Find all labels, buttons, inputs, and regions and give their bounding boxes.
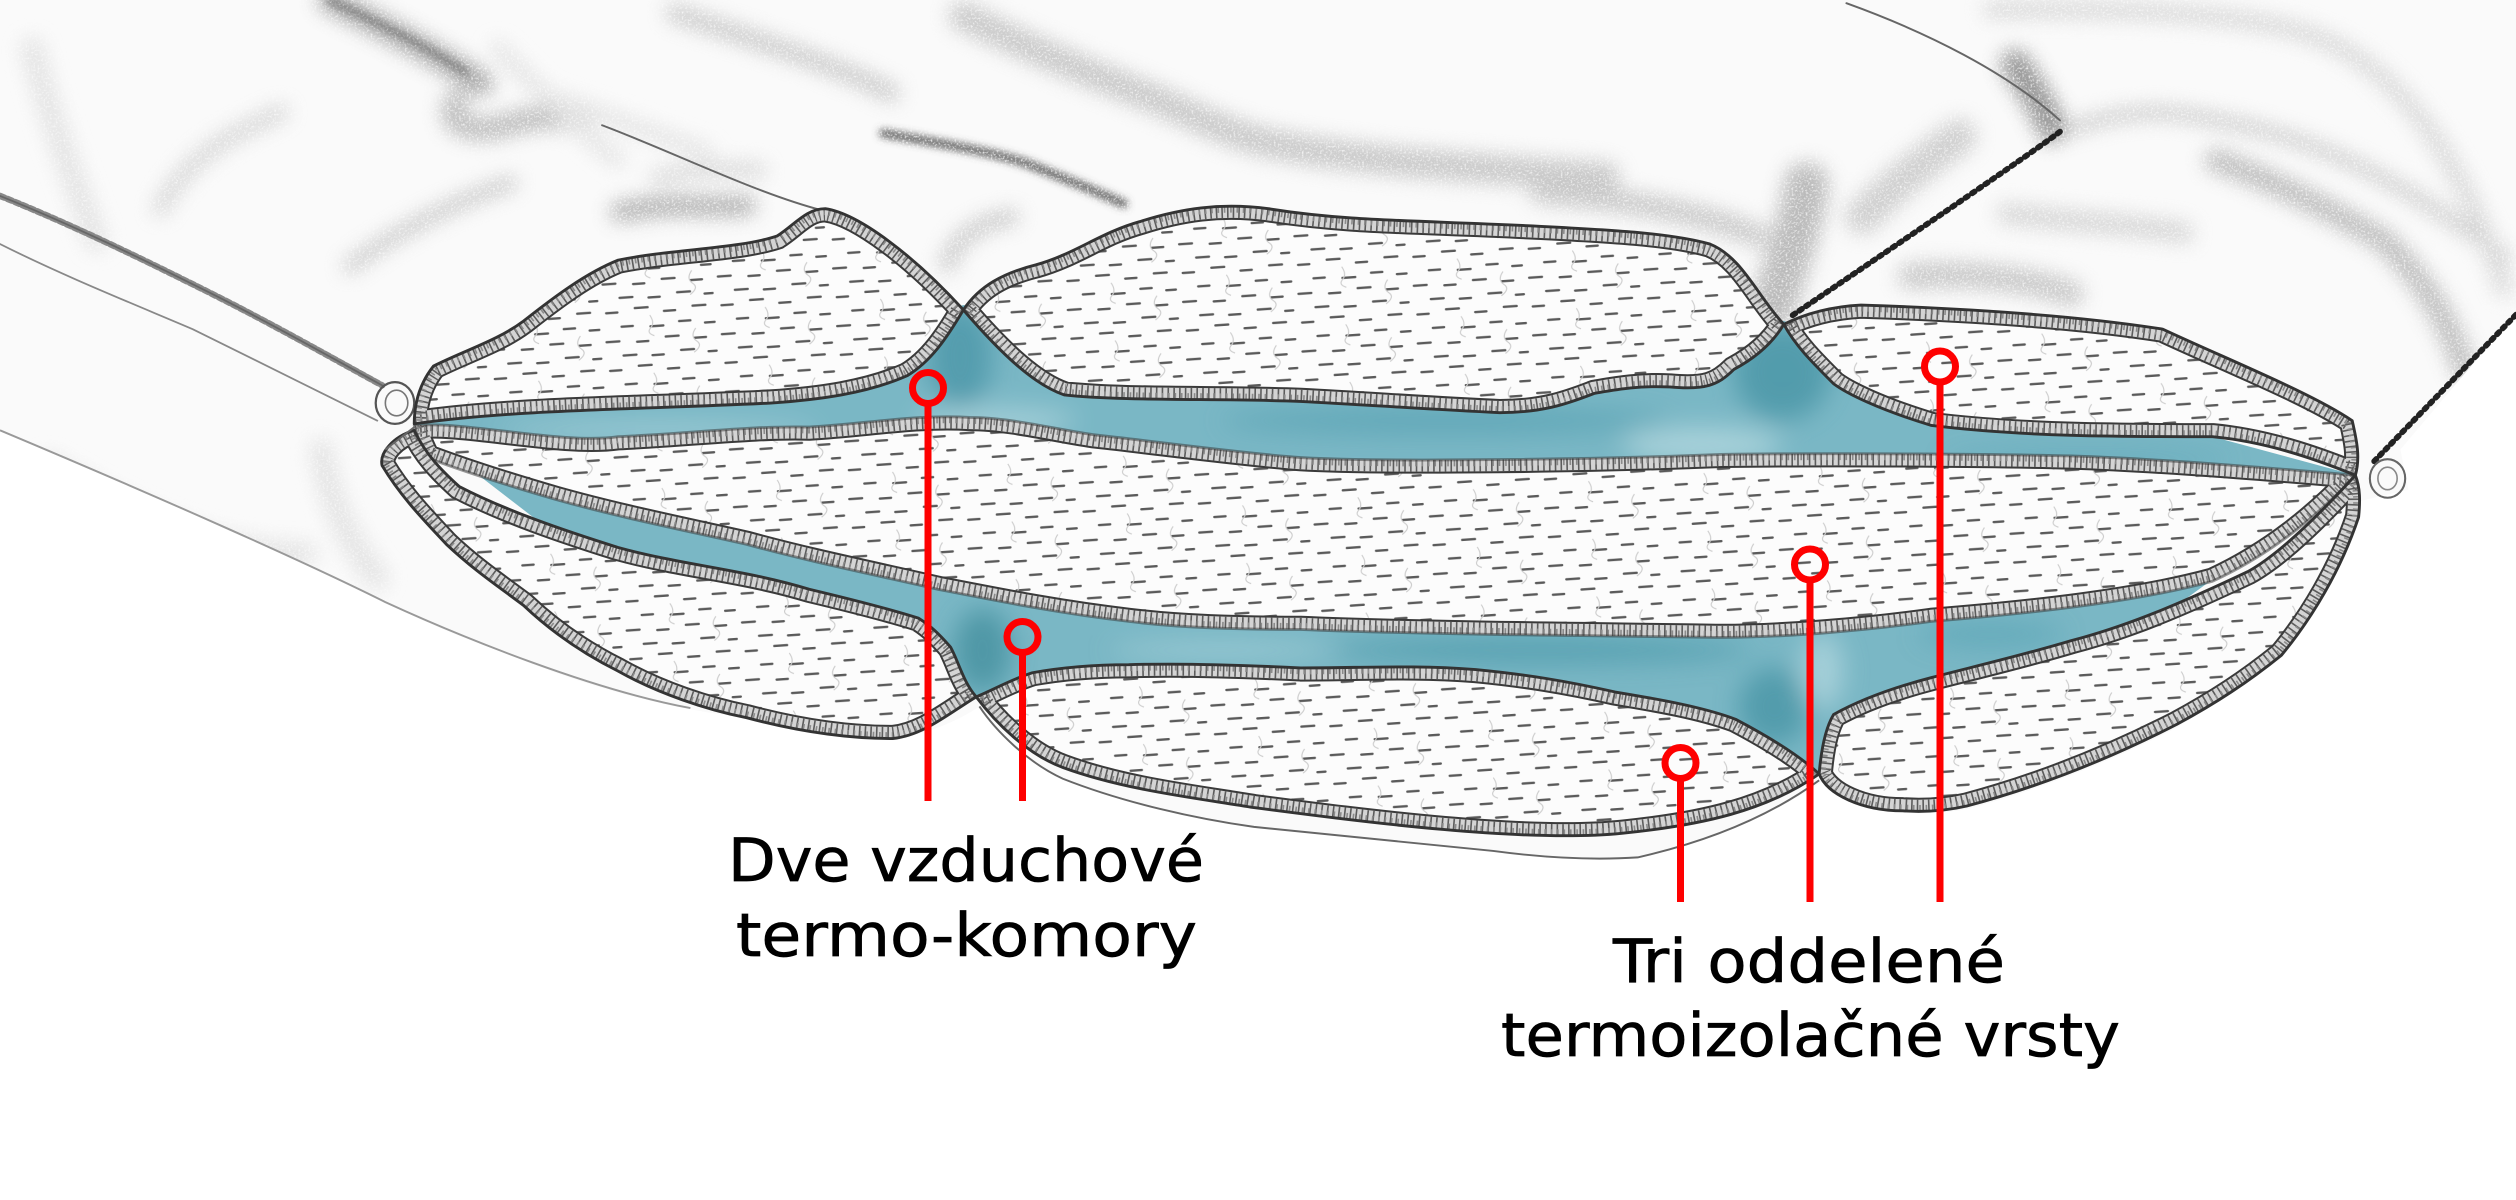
label: air chambers: Dve vzduchové — [728, 826, 1204, 896]
layer: top middle quilt cell — [963, 204, 1784, 414]
pointer: chamber 1 — [912, 372, 944, 801]
pointer: layer top — [1924, 351, 1956, 902]
illustration: mattress cross-section — [0, 0, 2516, 867]
pointer: chamber 2 — [1007, 622, 1038, 801]
pencil shading: fabric folds — [32, 0, 2505, 578]
label: air chambers: termo-komory — [736, 901, 1197, 971]
layer: top right quilt cell — [1784, 304, 2360, 476]
air chambers: blue fill — [415, 305, 2350, 771]
lower left outline — [0, 430, 690, 708]
label: air chambers — [728, 826, 1204, 971]
mattress silhouette — [0, 0, 2516, 859]
label: insulating layers — [1501, 927, 2120, 1071]
layer: bottom left quilt cell — [380, 428, 977, 740]
label: insulating layers: Tri oddelené — [1612, 927, 2005, 997]
left piping seam — [0, 196, 414, 424]
layer: bottom right quilt cell — [1818, 475, 2361, 813]
top outline seams — [602, 3, 2516, 498]
label: insulating layers: termoizolačné vrsty — [1501, 1001, 2120, 1071]
outer lip lines — [385, 427, 1819, 859]
layer: bottom middle quilt cell — [976, 662, 1818, 838]
pointer: layer middle — [1794, 549, 1826, 902]
layer: middle insulation — [412, 415, 2353, 639]
pointer: layer bottom — [1665, 748, 1696, 902]
layer: top left quilt cell — [412, 207, 964, 426]
